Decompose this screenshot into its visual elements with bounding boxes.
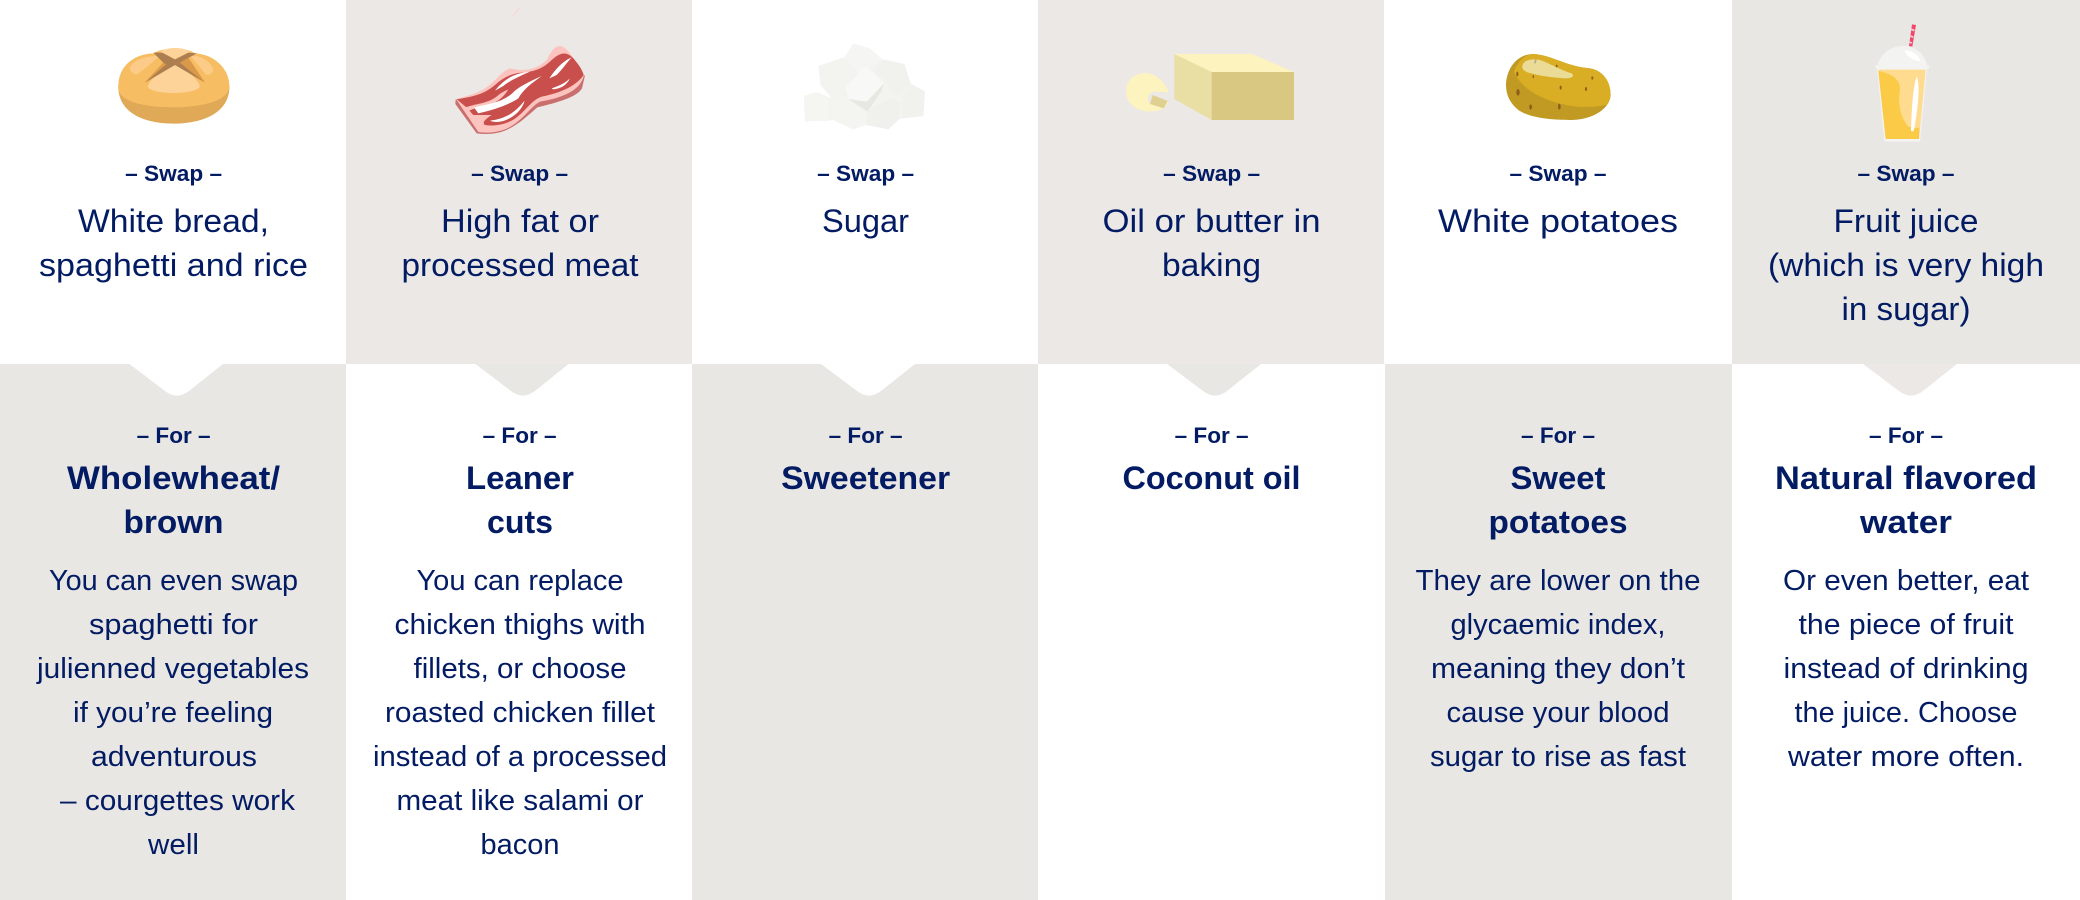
for label 5: – For – xyxy=(1521,423,1595,448)
body text 6: the juice. Choose xyxy=(1794,697,2018,729)
body text 2: meat like salami or xyxy=(396,785,644,817)
body text 5 xyxy=(1416,565,1700,773)
body text 1: adventurous xyxy=(91,741,257,773)
for label 6: – For – xyxy=(1869,423,1943,448)
for heading 2 xyxy=(466,460,574,540)
body text 2: roasted chicken fillet xyxy=(385,697,655,729)
swap text 6: in sugar) xyxy=(1842,291,1970,327)
body text 1: You can even swap xyxy=(49,565,298,597)
swap text 2: processed meat xyxy=(402,247,639,283)
swap text 1 xyxy=(39,203,308,283)
for heading 5: potatoes xyxy=(1488,504,1628,540)
pointer arrow 6 xyxy=(1863,364,1957,396)
swap text 5: White potatoes xyxy=(1438,203,1678,239)
body text 2 xyxy=(373,565,667,861)
for heading 3: Sweetener xyxy=(781,460,950,496)
body text 1: – courgettes work xyxy=(60,785,296,817)
swap text 2 xyxy=(402,203,639,283)
icon: sugar cubes xyxy=(804,43,925,129)
body text 1: julienned vegetables xyxy=(36,653,309,685)
pointer arrow 2 xyxy=(476,364,568,396)
icon: butter xyxy=(1126,54,1294,120)
for label 4: – For – xyxy=(1175,423,1249,448)
body text 5: sugar to rise as fast xyxy=(1430,741,1686,773)
for heading 1 xyxy=(67,460,280,540)
for heading 1: Wholewheat/ xyxy=(67,460,280,496)
swap label 6: – Swap – xyxy=(1858,161,1954,186)
column 5: white potatoes swap xyxy=(1384,0,1732,900)
panel: for 4 background xyxy=(1038,364,1385,900)
body text 2: chicken thighs with xyxy=(394,609,646,641)
body text 6: instead of drinking xyxy=(1784,653,2028,685)
body text 6: water more often. xyxy=(1787,741,2024,773)
panel: swap 6 background xyxy=(1732,0,2080,364)
for heading 2: cuts xyxy=(487,504,553,540)
body text 1: spaghetti for xyxy=(89,609,259,641)
panel: swap 1 background xyxy=(0,0,346,364)
body text 2: bacon xyxy=(480,829,560,861)
for label 3: – For – xyxy=(829,423,903,448)
panel: swap 4 background xyxy=(1038,0,1384,364)
for heading 1: brown xyxy=(124,504,224,540)
swap text 2: High fat or xyxy=(441,203,599,239)
for heading 6: Natural flavored xyxy=(1775,460,2037,496)
panel: for 6 background xyxy=(1732,364,2080,900)
body text 2: You can replace xyxy=(416,565,624,597)
body text 6 xyxy=(1783,565,2029,773)
body text 1: if you’re feeling xyxy=(73,697,273,729)
pointer arrow 4 xyxy=(1167,364,1261,396)
for heading 5 xyxy=(1488,460,1628,540)
column 2: processed meat swap xyxy=(346,0,692,900)
swap label 3: – Swap – xyxy=(817,161,914,186)
panel: for 5 background xyxy=(1385,364,1732,900)
pointer arrow 1 xyxy=(130,364,223,396)
swap text 1: White bread, xyxy=(78,203,269,239)
for heading 6 xyxy=(1775,460,2037,540)
body text 5: They are lower on the xyxy=(1416,565,1700,597)
for label 1: – For – xyxy=(137,423,211,448)
column 1: white bread swap xyxy=(0,0,346,900)
body text 1: well xyxy=(147,829,199,861)
swap text 6 xyxy=(1768,203,2044,327)
panel: swap 5 background xyxy=(1384,0,1732,364)
panel: swap 3 background xyxy=(692,0,1038,364)
panel: for 3 background xyxy=(692,364,1038,900)
swap text 4 xyxy=(1102,203,1320,283)
swap label 1: – Swap – xyxy=(125,161,222,186)
swap label 4: – Swap – xyxy=(1163,161,1260,186)
swap text 6: Fruit juice xyxy=(1834,203,1978,239)
swap text 1: spaghetti and rice xyxy=(39,247,308,283)
panel: swap 2 background xyxy=(346,0,692,364)
panel: for 1 background xyxy=(0,364,346,900)
swap text 4: Oil or butter in xyxy=(1102,203,1320,239)
icon: potato xyxy=(1506,54,1611,120)
column 3: sugar swap xyxy=(692,0,1038,900)
column 6: fruit juice swap xyxy=(1732,0,2080,900)
body text 5: glycaemic index, xyxy=(1450,609,1666,641)
for heading 5: Sweet xyxy=(1510,460,1606,496)
for label 2: – For – xyxy=(483,423,557,448)
body text 6: the piece of fruit xyxy=(1798,609,2014,641)
for heading 6: water xyxy=(1859,504,1952,540)
pointer arrow 3 xyxy=(821,364,915,396)
body text 1 xyxy=(36,565,309,861)
body text 5: meaning they don’t xyxy=(1431,653,1685,685)
column 4: oil or butter swap xyxy=(1038,0,1385,900)
swap text 3: Sugar xyxy=(822,203,909,239)
icon: bacon xyxy=(455,6,585,134)
icon: juice cup xyxy=(1875,24,1929,142)
body text 2: fillets, or choose xyxy=(414,653,626,685)
icon: bread roll xyxy=(118,48,229,124)
body text 5: cause your blood xyxy=(1446,697,1670,729)
body text 6: Or even better, eat xyxy=(1783,565,2029,597)
for heading 4: Coconut oil xyxy=(1122,460,1300,496)
body text 2: instead of a processed xyxy=(373,741,667,773)
swap text 4: baking xyxy=(1162,247,1261,283)
swap text 6: (which is very high xyxy=(1768,247,2044,283)
for heading 2: Leaner xyxy=(466,460,574,496)
swap label 5: – Swap – xyxy=(1510,161,1606,186)
swap label 2: – Swap – xyxy=(471,161,568,186)
panel: for 2 background xyxy=(346,364,692,900)
